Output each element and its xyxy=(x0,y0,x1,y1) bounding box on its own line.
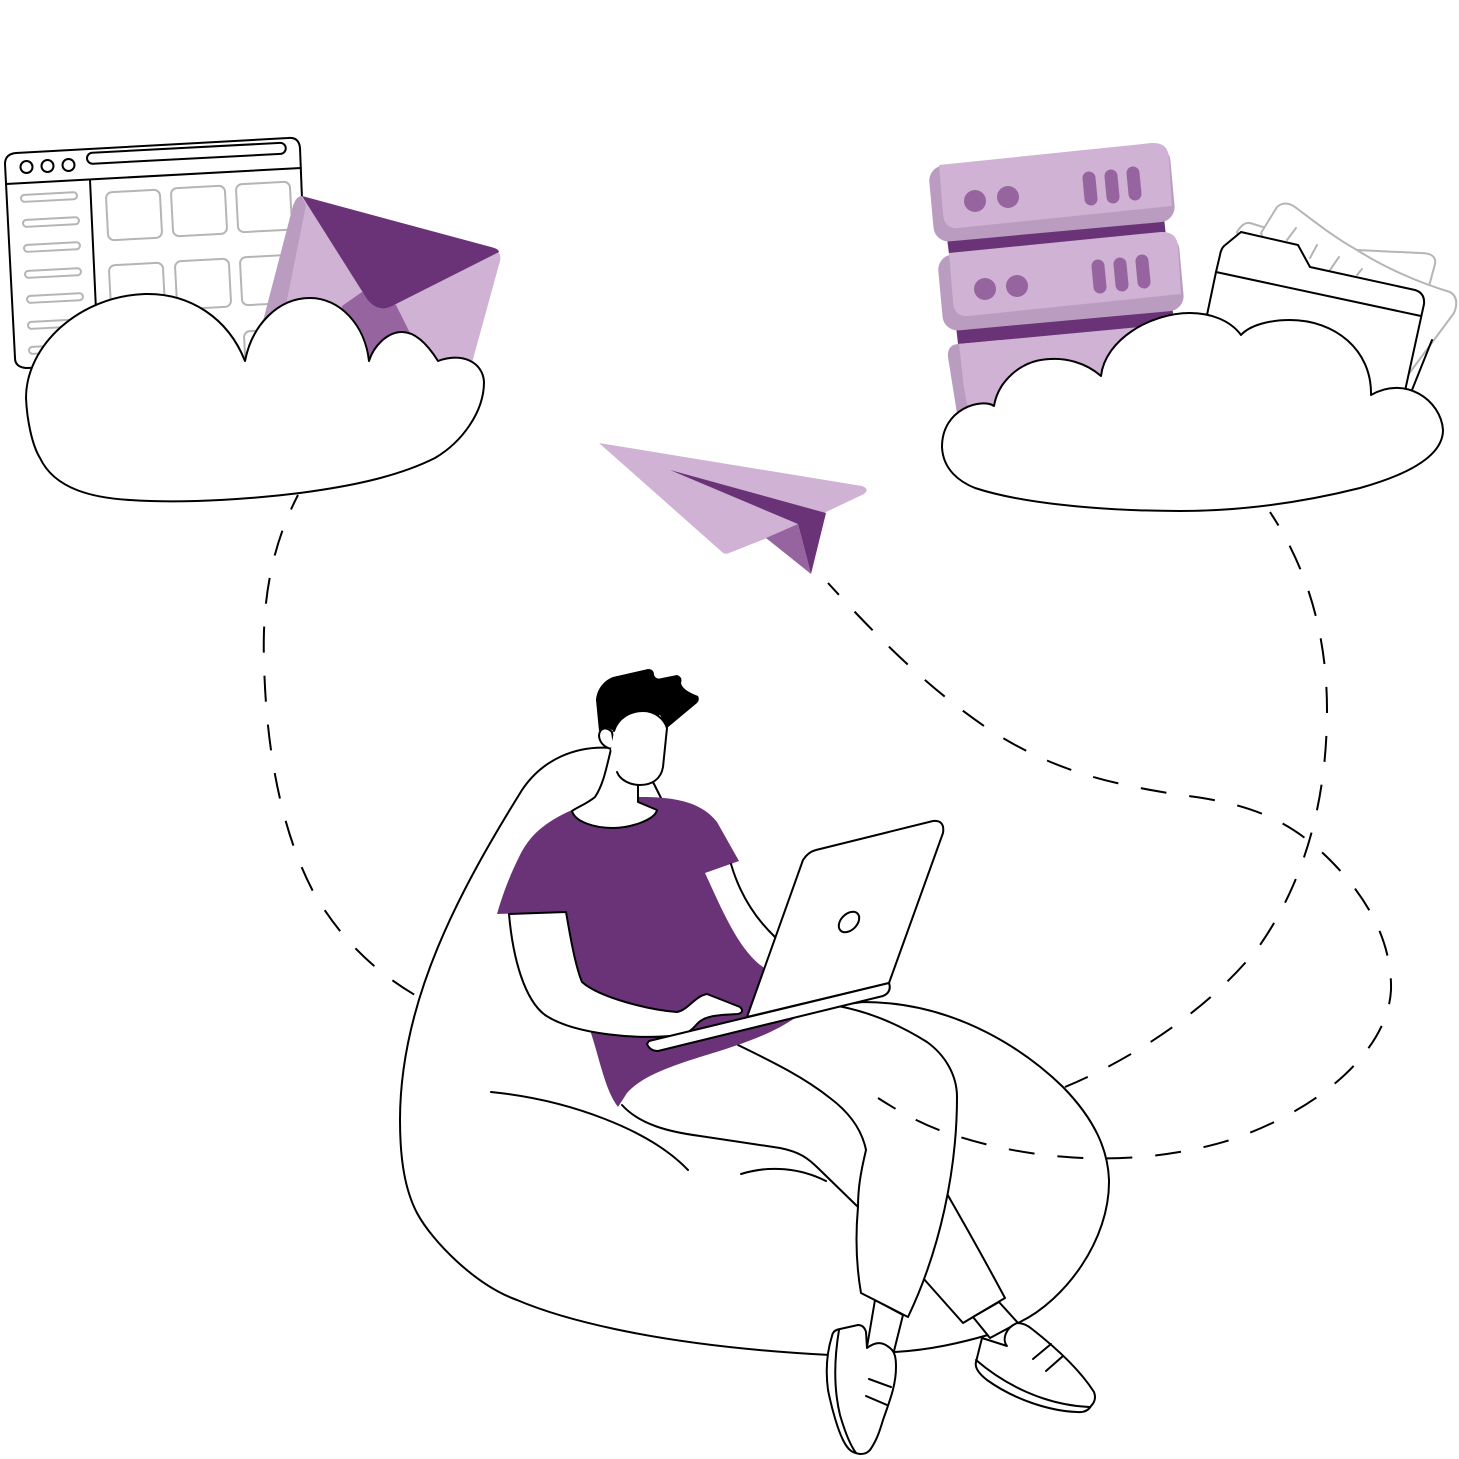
front shoe xyxy=(827,1325,896,1454)
dashed path: right cloud to person xyxy=(1065,512,1327,1087)
shirt xyxy=(497,795,795,1107)
face outline xyxy=(614,711,667,785)
bean bag xyxy=(400,748,1109,1355)
server connector bars xyxy=(947,218,1175,344)
laptop xyxy=(647,821,943,1051)
neck xyxy=(572,740,657,828)
server unit 2 xyxy=(937,232,1185,332)
left arm xyxy=(509,912,742,1037)
face xyxy=(611,711,667,785)
browser window xyxy=(5,138,306,379)
folder xyxy=(1207,232,1432,400)
right cloud xyxy=(942,313,1443,511)
documents behind folder xyxy=(1237,204,1456,375)
ear xyxy=(599,728,614,749)
server stack xyxy=(928,143,1185,420)
dashed path: left cloud to person xyxy=(264,495,420,998)
front leg trousers xyxy=(622,1006,957,1317)
paper plane xyxy=(599,443,867,574)
server unit 1 xyxy=(928,143,1176,243)
dashed path: paper plane loop xyxy=(828,583,1391,1158)
hair xyxy=(596,669,699,731)
socks xyxy=(867,1300,1018,1355)
person on bean bag xyxy=(400,669,1109,1454)
left cloud xyxy=(26,294,484,501)
right arm xyxy=(731,864,775,937)
back shoe xyxy=(976,1323,1095,1412)
envelope xyxy=(262,196,500,370)
back leg xyxy=(923,1192,1005,1323)
server unit 3 xyxy=(948,324,1175,420)
